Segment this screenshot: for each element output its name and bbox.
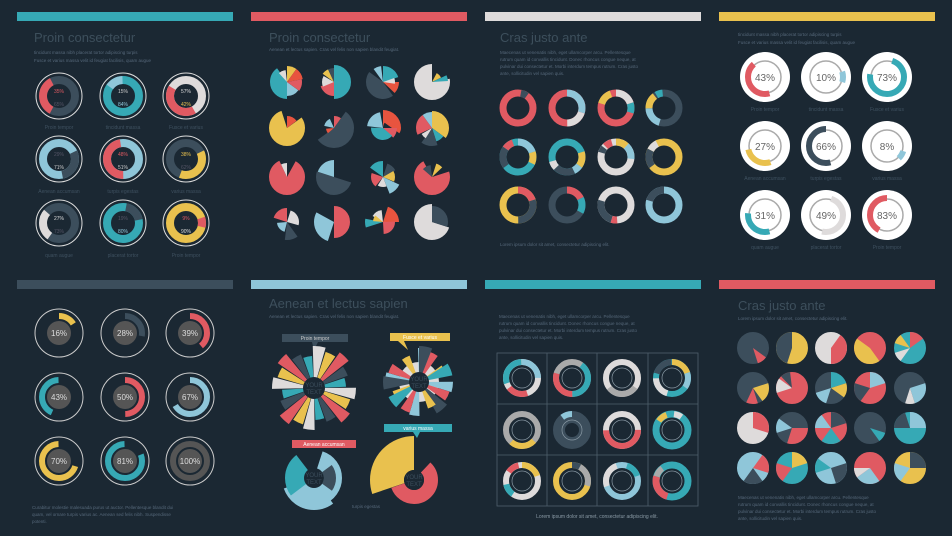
panel: donut percentages 1: Fusce et varius	[169, 125, 203, 131]
panel: progress donuts: 39%	[182, 329, 198, 338]
panel: donut percentages 1: 48%	[118, 152, 129, 158]
panel: white circle gauges: 83%	[877, 211, 897, 222]
panel: donut percentages 1: 51%	[118, 165, 129, 171]
burst chart 2	[401, 364, 437, 400]
panel: pie grid: ante, sollicitudin vel sapien quis.	[738, 516, 802, 521]
panel: pie grid: pulvinar dui consectetur et. Morbi interdum tempus rutrum. Cras justo	[738, 509, 877, 514]
panel: donut percentages 1: 42%	[181, 102, 192, 108]
panel: donut percentages 1: 73%	[54, 229, 65, 235]
callout labels: Aenean accumsan	[303, 442, 345, 448]
panel: radial burst charts: TEXT	[306, 390, 322, 396]
panel: donut percentages 1: placerat tortor	[108, 253, 139, 259]
panel: white circle gauges: Proin tempor	[873, 245, 902, 251]
panel: donut percentages 1: varius massa	[171, 189, 201, 195]
panel: progress donuts: 28%	[117, 329, 133, 338]
panel: grid donuts	[497, 314, 698, 520]
panel: donut percentages 1: 65%	[54, 102, 65, 108]
callout labels: varius massa	[403, 426, 433, 432]
text block: Maecenas ut venenatis nibh, eget ullamcorper arcu. Pellentesque	[499, 314, 630, 319]
panel: progress donuts: 50%	[117, 393, 133, 402]
text block: Maecenas ut venenatis nibh, eget ullamcorper arcu. Pellentesque	[738, 495, 869, 500]
panel: progress donuts: 70%	[51, 457, 67, 466]
panel: donut percentages 1: 84%	[118, 102, 129, 108]
panel: donut percentages 1: turpis egestas	[107, 189, 139, 195]
panel: white circle gauges: 43%	[755, 73, 775, 84]
panel: radial burst charts: TEXT	[406, 482, 422, 488]
panel: radial burst charts: YOUR	[305, 383, 323, 389]
panel: radial burst charts: TEXT	[411, 384, 427, 390]
panel: progress donuts: potenti.	[32, 519, 47, 524]
panel: donut percentages 1: 57%	[181, 89, 192, 95]
heading: Proin consectetur	[269, 30, 371, 45]
burst chart 1	[292, 366, 336, 410]
panel: pie grid	[738, 298, 918, 521]
text block: Aenean et lectus sapien. Cras vel felis non sapien blandit feugiat.	[269, 47, 399, 52]
panel: white circle gauges: Fusce et varius massa velit id feugiat facilisis, quam augue	[738, 40, 856, 45]
panel: white circle gauges: 49%	[816, 211, 836, 222]
text block: Aenean et lectus sapien. Cras vel felis non sapien blandit feugiat.	[269, 314, 399, 319]
panel: white circle gauges: quam augue	[751, 245, 779, 251]
footer text: Lorem ipsum dolor sit amet, consectetur adipiscing elit.	[536, 514, 658, 520]
panel: white circle gauges: 27%	[755, 142, 775, 153]
panel: ring donuts: rutrum quam id convallis tincidunt. Donec rhoncus congue neque, at	[500, 57, 636, 62]
panel: white circle gauges: Fusce et varius	[870, 107, 904, 113]
panel: radial burst charts	[269, 296, 452, 509]
panel: white circle gauges: 31%	[755, 211, 775, 222]
text block: Lorem ipsum dolor sit amet, consectetur adipiscing elit.	[738, 316, 848, 321]
header bars	[17, 12, 935, 289]
panel: white circle gauges: 8%	[880, 142, 894, 153]
panel: grid donuts: ante, sollicitudin vel sapien quis.	[499, 335, 563, 340]
panel: donut percentages 1: 19%	[118, 216, 129, 222]
panel: donut percentages 1: 29%	[54, 152, 65, 158]
panel: white circle gauges: Aenean accumsan	[744, 176, 786, 182]
panel: white circle gauges	[738, 32, 912, 251]
panel: grid donuts: pulvinar dui consectetur et. Morbi interdum tempus rutrum. Cras justo	[499, 328, 638, 333]
panel: progress donuts: 16%	[51, 329, 67, 338]
donut chart 4	[387, 453, 441, 507]
panel: donut percentages 1: tincidunt massa	[106, 125, 141, 131]
panel: pie grid: rutrum quam id convallis tincidunt. Donec rhoncus congue neque, at	[738, 502, 874, 507]
panel: white circle gauges: varius massa	[872, 176, 902, 182]
heading: Cras justo ante	[500, 30, 587, 45]
text block: tincidunt massa nibh placerat tortor adipiscing turpis	[34, 50, 138, 55]
panel: progress donuts: 43%	[51, 393, 67, 402]
panel: donut percentages 1: 80%	[118, 229, 129, 235]
panel: donut percentages 1: 62%	[181, 165, 192, 171]
panel: donut percentages 1: 90%	[181, 229, 192, 235]
panel: donut percentages 1: 71%	[54, 165, 65, 171]
panel: donut percentages 1: 27%	[54, 216, 65, 222]
panel: donut percentages 1: 9%	[182, 216, 190, 222]
callout labels: Fusce et varius	[403, 335, 437, 341]
panel: donut percentages 1: 38%	[181, 152, 192, 158]
panel: donut percentages 1: 35%	[54, 89, 65, 95]
panel: donut percentages 1: Fusce et varius massa velit id feugiat facilisis, quam augue	[34, 58, 152, 63]
panel: progress donuts: quam, vel ornare turpis varius ac. Aenean sed felis nibh. Suspendisse	[32, 512, 171, 517]
panel: white circle gauges: Proin tempor	[751, 107, 780, 113]
panel: donut percentages 1	[34, 30, 209, 259]
panel: white circle gauges: placerat tortor	[811, 245, 842, 251]
donut chart 3	[294, 458, 334, 498]
panel: progress donuts	[32, 309, 214, 524]
panel: white circle gauges: tincidunt massa	[809, 107, 844, 113]
panel: donut percentages 1: Aenean accumsan	[38, 189, 80, 195]
panel: ring donuts: ante, sollicitudin vel sapien quis.	[500, 71, 564, 76]
panel: donut percentages 1: Proin tempor	[172, 253, 201, 259]
panel: white circle gauges: 73%	[877, 73, 897, 84]
panel: white circle gauges: turpis egestas	[810, 176, 842, 182]
panel: radial burst charts: TEXT	[306, 480, 322, 486]
heading: Aenean et lectus sapien	[269, 296, 408, 311]
panel: progress donuts: 100%	[180, 457, 200, 466]
text block: Maecenas ut venenatis nibh, eget ullamcorper arcu. Pellentesque	[500, 50, 631, 55]
callout labels	[282, 333, 452, 448]
panel: radial burst charts: turpis egestas	[352, 504, 381, 509]
text block: tincidunt massa nibh placerat tortor adipiscing turpis	[738, 32, 842, 37]
heading: Cras justo ante	[738, 298, 825, 313]
panel: radial burst charts: YOUR	[410, 377, 428, 383]
text block: Curabitur molestie malesuada purus ut auctor. Pellentesque blandit dui	[32, 505, 173, 510]
panel: donut percentages 1: 15%	[118, 89, 129, 95]
panel: donut percentages 1: quam augue	[45, 253, 73, 259]
panel: white circle gauges: 66%	[816, 142, 836, 153]
panel: radial burst charts: YOUR	[405, 475, 423, 481]
panel: donut percentages 1: Proin tempor	[45, 125, 74, 131]
panel: exploded pies	[269, 30, 441, 232]
panel: progress donuts: 67%	[182, 393, 198, 402]
callout labels: Proin tempor	[301, 336, 330, 342]
panel: white circle gauges: 10%	[816, 73, 836, 84]
panel: ring donuts: pulvinar dui consectetur et. Morbi interdum tempus rutrum. Cras justo	[500, 64, 639, 69]
panel: progress donuts: 81%	[117, 457, 133, 466]
panel: grid donuts: rutrum quam id convallis tincidunt. Donec rhoncus congue neque, at	[499, 321, 635, 326]
footer text: Lorem ipsum dolor sit amet, consectetur adipiscing elit.	[500, 242, 610, 247]
panel: radial burst charts: YOUR	[305, 473, 323, 479]
heading: Proin consectetur	[34, 30, 136, 45]
panel: ring donuts	[500, 30, 679, 247]
